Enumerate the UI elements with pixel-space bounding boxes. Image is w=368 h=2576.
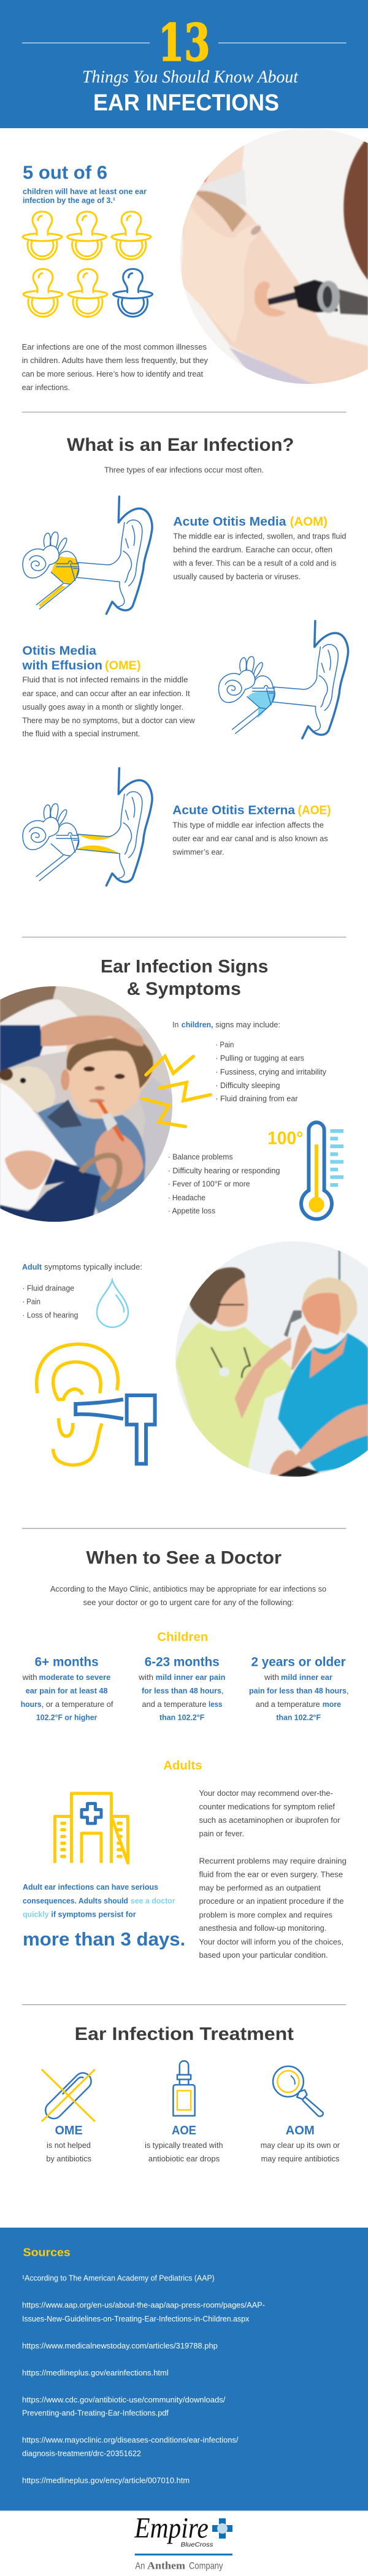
- text: adult symptoms: · Loss of hearing: [22, 1311, 78, 1320]
- text: adults advice right column: procedure or an inpatient procedure if the: [199, 1896, 344, 1906]
- callout: adult consequences: [23, 1882, 185, 1950]
- title script line: Things You Should Know About: [82, 68, 299, 87]
- intro paragraph: in children. Adults have them less frequently, but they: [22, 356, 208, 365]
- diagram: AOM ear: [23, 496, 152, 614]
- text: children signs: · Fussiness, crying and irritability: [215, 1067, 326, 1076]
- text: adults advice right column: fluid from the ear or even surgery. These: [199, 1869, 343, 1879]
- text: AOM: with a fever. This can be a result of a cold and is: [172, 558, 337, 568]
- logo: Empire BlueCross: Anthem: [147, 2560, 185, 2572]
- text: OME treatment: [46, 2124, 91, 2163]
- heading: signs and symptoms: & Symptoms: [127, 979, 241, 999]
- diagram: OME ear: [219, 621, 348, 738]
- sources list: https://www.cdc.gov/antibiotic-use/community/downloads/: [22, 2395, 226, 2404]
- text: AOM: behind the eardrum. Earache can occur, often: [173, 545, 332, 554]
- text: AOM treatment: AOM: [286, 2124, 315, 2137]
- text: AOM: The middle ear is infected, swollen, and traps fluid: [173, 532, 346, 541]
- text: 100 degrees: 100°: [267, 1129, 303, 1149]
- icon: magnifying glass: [273, 2066, 323, 2117]
- panel: sources: [0, 2228, 368, 2511]
- icon: hospital: [55, 1793, 128, 1863]
- sources list: https://www.aap.org/en-us/about-the-aap/aap-press-room/pages/AAP-: [22, 2301, 265, 2310]
- heading: signs and symptoms: [101, 957, 268, 999]
- text: AOE: This type of middle ear infection affects the: [172, 820, 324, 829]
- text: OME: Fluid that is not infected remains in the middle: [22, 675, 188, 684]
- text: AOE: [172, 803, 331, 856]
- text: adults advice right column: based upon your particular condition.: [199, 1950, 328, 1960]
- column: 6+ months: ear pain for at least 48: [26, 1686, 108, 1695]
- text: adults advice right column: Recurrent problems may require draining: [199, 1856, 347, 1865]
- logo: Empire BlueCross: [134, 2512, 232, 2572]
- stat: 5 out of 6: [23, 162, 147, 205]
- sources list: https://medlineplus.gov/earinfections.html: [22, 2368, 169, 2377]
- intro: mayo clinic: [50, 1584, 326, 1607]
- text: AOE: outer ear and ear canal and is also known as: [172, 834, 328, 843]
- column: 6+ months: [21, 1655, 113, 1722]
- icon: fluid drop: [97, 1280, 128, 1327]
- column: 2 years or older: pain for less than 48 hours: [249, 1686, 347, 1695]
- text: more child signs: · Fever of 100°F or more: [168, 1179, 250, 1189]
- text: AOE treatment: is typically treated with: [145, 2141, 223, 2150]
- intro: mayo clinic: According to the Mayo Clinic, antibiotics may be appropriate for ear infections so: [50, 1584, 326, 1593]
- text: adult symptoms: symptoms typically include:: [44, 1262, 142, 1271]
- text: OME: with Effusion: [21, 659, 102, 672]
- text: OME: ear space, and can occur after an ear infection. It: [22, 689, 190, 698]
- text: adults advice right column: counter medications for symptom relief: [199, 1802, 335, 1811]
- column: 6-23 months: than 102.2°F: [159, 1713, 204, 1722]
- text: children signs: signs may include:: [215, 1020, 280, 1029]
- text: OME treatment: OME: [55, 2124, 83, 2137]
- callout: adult consequences: quickly: [23, 1910, 49, 1919]
- text: adults advice right column: [199, 1788, 347, 1960]
- text: children signs: In: [172, 1020, 178, 1029]
- text: adult symptoms: [22, 1262, 142, 1320]
- text: more child signs: [168, 1152, 280, 1216]
- text: children signs: · Pulling or tugging at ears: [215, 1054, 304, 1063]
- logo: Empire BlueCross: Company: [189, 2561, 223, 2572]
- text: more child signs: · Balance problems: [168, 1152, 233, 1162]
- text: AOE: swimmer’s ear.: [172, 847, 224, 856]
- column: 6-23 months: 6-23 months: [145, 1655, 220, 1669]
- text: adults advice right column: Your doctor will inform you of the choices,: [199, 1937, 343, 1946]
- icon: ear and otoscope: [37, 1344, 155, 1465]
- column: 6+ months: 102.2°F or higher: [36, 1713, 97, 1722]
- column: 6+ months: with: [22, 1673, 37, 1682]
- text: children signs: children,: [182, 1020, 213, 1029]
- text: adults advice right column: may be performed as an outpatient: [199, 1883, 321, 1892]
- sources list: ¹According to The American Academy of Pediatrics (AAP): [22, 2274, 215, 2283]
- column: 6-23 months: ,: [221, 1686, 224, 1695]
- heading: signs and symptoms: Ear Infection Signs: [101, 957, 268, 977]
- sources list: diagnosis-treatment/drc-20351622: [22, 2448, 141, 2458]
- text: OME: There may be no symptoms, but a doctor can view: [22, 716, 195, 725]
- header banner: [0, 0, 368, 128]
- text: AOE: (AOE): [298, 803, 331, 817]
- intro paragraph: ear infections.: [22, 383, 70, 392]
- heading: children: Children: [157, 1631, 208, 1644]
- text: AOM treatment: may require antibiotics: [261, 2154, 340, 2163]
- text: OME: the fluid with a special instrument.: [22, 729, 140, 738]
- text: AOM: Acute Otitis Media: [173, 515, 286, 529]
- intro paragraph: can be more serious. Here’s how to identify and treat: [22, 369, 203, 378]
- callout: adult consequences: more than 3 days.: [23, 1928, 185, 1950]
- sources list: [22, 2274, 265, 2485]
- column: 2 years or older: than 102.2°F: [276, 1713, 321, 1722]
- column: 2 years or older: more: [323, 1700, 341, 1709]
- diagram: AOE ear: [23, 768, 152, 886]
- stat: 5 out of 6: infection by the age of 3.¹: [23, 196, 115, 205]
- callout: adult consequences: if symptoms persist for: [51, 1910, 136, 1919]
- heading: when to see a doctor: When to See a Doctor: [86, 1547, 282, 1568]
- column: 6-23 months: [138, 1655, 225, 1722]
- text: AOM treatment: [261, 2124, 340, 2163]
- photo: otoscope exam on a baby: [178, 126, 368, 387]
- callout: adult consequences: see a doctor: [131, 1896, 175, 1905]
- intro: mayo clinic: see your doctor or go to urgent care for any of the following:: [83, 1598, 294, 1607]
- sources list: https://www.mayoclinic.org/diseases-conditions/ear-infections/: [22, 2436, 239, 2445]
- text: more child signs: · Appetite loss: [168, 1206, 215, 1216]
- text: AOE treatment: [145, 2124, 223, 2163]
- sources heading: Sources: [23, 2246, 71, 2258]
- heading: what is an ear infection: What is an Ear Infection?: [67, 435, 294, 455]
- intro paragraph: [22, 342, 208, 392]
- text: adults advice right column: problem is more complex and requires: [199, 1910, 332, 1919]
- column: 2 years or older: and a temperature: [256, 1700, 320, 1709]
- sources list: https://www.medicalnewstoday.com/articles/319788.php: [22, 2341, 218, 2350]
- icon: pain zigzags: [142, 1056, 210, 1127]
- column: 6-23 months: less: [209, 1700, 222, 1709]
- column: 6-23 months: for less than 48 hours: [142, 1686, 221, 1695]
- text: AOE: Acute Otitis Externa: [172, 803, 296, 817]
- text: children signs: · Fluid draining from ear: [215, 1094, 298, 1103]
- heading: treatment: Ear Infection Treatment: [75, 2024, 294, 2044]
- sources list: Issues-New-Guidelines-on-Treating-Ear-Infections-in-Children.aspx: [22, 2314, 250, 2323]
- heading: adults: Adults: [163, 1759, 202, 1773]
- text: adult symptoms: · Fluid drainage: [22, 1284, 74, 1293]
- column: 6+ months: hours: [21, 1700, 42, 1709]
- logo: Empire BlueCross: BlueCross: [181, 2542, 213, 2548]
- logo: Empire BlueCross: Empire: [134, 2512, 209, 2545]
- text: OME treatment: is not helped: [47, 2141, 91, 2150]
- text: OME: (OME): [105, 659, 141, 672]
- text: AOM: [172, 515, 346, 581]
- text: children signs: · Pain: [215, 1040, 234, 1049]
- column: 2 years or older: 2 years or older: [251, 1655, 346, 1669]
- text: AOM treatment: may clear up its own or: [261, 2141, 340, 2150]
- text: more child signs: · Difficulty hearing or responding: [168, 1166, 280, 1175]
- text: AOE treatment: AOE: [172, 2124, 196, 2137]
- stat: 5 out of 6: 5 out of 6: [23, 162, 107, 183]
- title ear infections: EAR INFECTIONS: [93, 90, 279, 116]
- text: adult symptoms: · Pain: [22, 1297, 40, 1306]
- icon: thermometer: [301, 1122, 343, 1219]
- column: 6-23 months: with: [138, 1673, 153, 1682]
- column: 6+ months: moderate to severe: [39, 1673, 110, 1682]
- column: 2 years or older: mild inner ear: [281, 1673, 332, 1682]
- text: OME: usually goes away in a month or slightly longer.: [22, 702, 183, 711]
- icon: crossed-out pill: [42, 2069, 95, 2122]
- icon: ear drops bottle: [173, 2061, 195, 2116]
- photo: doctor examining patient: [172, 1239, 368, 1484]
- stat: 5 out of 6: children will have at least one ear: [23, 186, 147, 196]
- text: adults advice right column: such as acetaminophen or ibuprofen for: [199, 1815, 340, 1825]
- column: 6-23 months: and a temperature: [142, 1700, 206, 1709]
- text: adults advice right column: anesthesia and follow-up monitoring.: [199, 1923, 326, 1933]
- subheading: Three types of ear infections occur most often.: [104, 466, 264, 475]
- text: AOM: (AOM): [290, 515, 328, 529]
- text: OME: [21, 644, 195, 738]
- text: adults advice right column: Your doctor may recommend over-the-: [199, 1788, 333, 1798]
- text: AOM: usually caused by bacteria or viruses.: [173, 572, 301, 581]
- text: children signs: · Difficulty sleeping: [215, 1081, 280, 1090]
- text: children signs: [172, 1020, 326, 1103]
- text: more child signs: · Headache: [168, 1193, 205, 1202]
- sources list: https://medlineplus.gov/ency/article/007010.htm: [22, 2475, 190, 2485]
- text: adult symptoms: Adult: [22, 1262, 42, 1271]
- icons: six pacifiers: [23, 212, 153, 316]
- column: 2 years or older: [249, 1655, 349, 1722]
- column: 6+ months: 6+ months: [35, 1655, 99, 1669]
- logo: Empire BlueCross: An: [135, 2561, 145, 2572]
- text: OME: Otitis Media: [22, 644, 97, 657]
- intro paragraph: Ear infections are one of the most common illnesses: [22, 342, 207, 351]
- title number 13: 13: [158, 13, 210, 72]
- text: OME treatment: by antibiotics: [46, 2154, 91, 2163]
- column: 2 years or older: with: [264, 1673, 279, 1682]
- column: 2 years or older: ,: [347, 1686, 349, 1695]
- text: adults advice right column: pain or fever.: [199, 1829, 244, 1838]
- text: AOE treatment: antiobiotic ear drops: [148, 2154, 220, 2163]
- photo: child with thermometer: [0, 981, 178, 1227]
- column: 6-23 months: mild inner ear pain: [156, 1673, 225, 1682]
- callout: adult consequences: consequences. Adults should: [23, 1896, 128, 1905]
- sources list: Preventing-and-Treating-Ear-Infections.pdf: [22, 2409, 169, 2418]
- column: 6+ months: , or a temperature of: [42, 1700, 113, 1709]
- callout: adult consequences: Adult ear infections can have serious: [23, 1882, 158, 1892]
